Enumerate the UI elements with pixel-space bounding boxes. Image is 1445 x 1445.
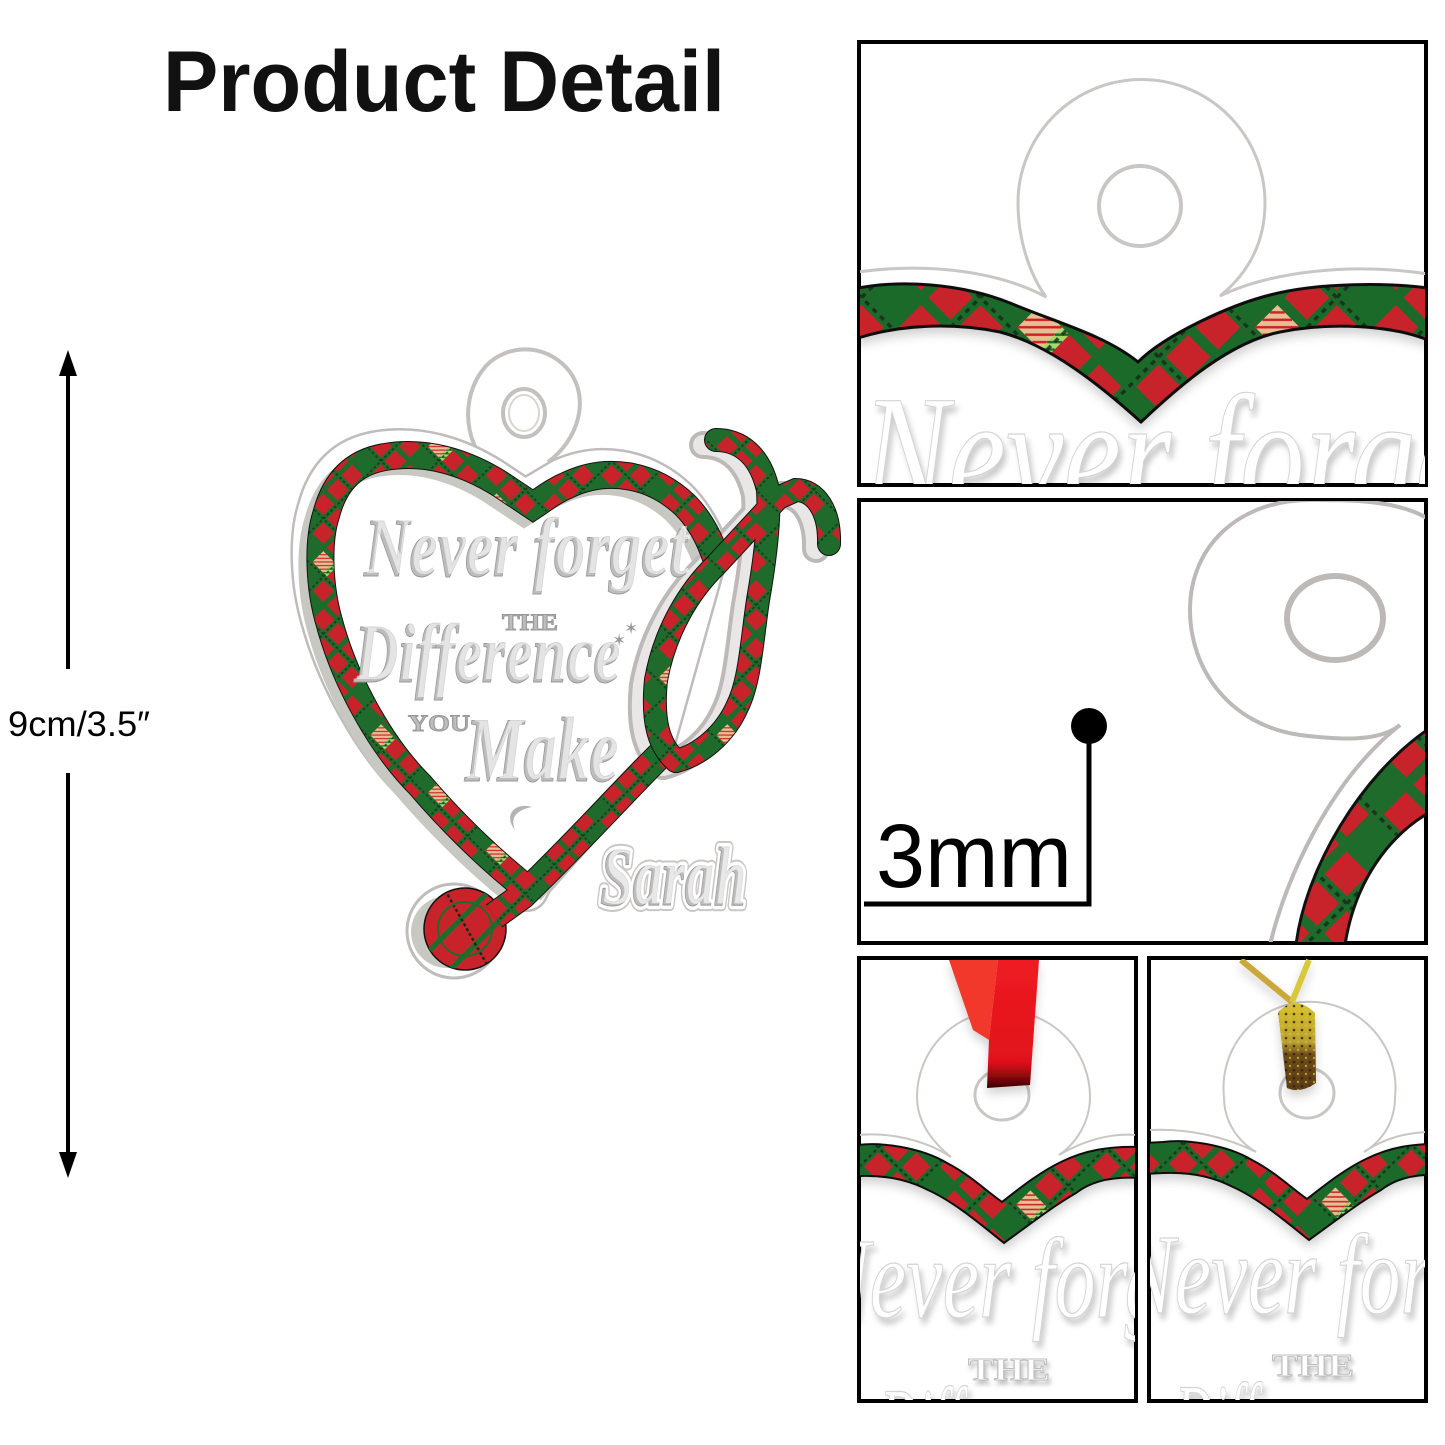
plaid heart band bbox=[320, 455, 716, 916]
engraved message: Difference bbox=[356, 605, 623, 698]
panel frame bbox=[859, 42, 1426, 485]
plaid band close-up bbox=[1145, 1141, 1445, 1240]
shadow of heart band bbox=[311, 462, 707, 902]
gold cord bbox=[1241, 960, 1316, 1090]
personalised name: Sarah bbox=[600, 831, 746, 924]
heart interior bbox=[343, 482, 690, 875]
tab hole bbox=[975, 1070, 1029, 1120]
engraved message: Never forget bbox=[366, 499, 691, 592]
panel: 3mm thickness bbox=[859, 500, 1430, 945]
tab hole bbox=[1099, 166, 1181, 246]
personalised name: Sarah bbox=[600, 831, 746, 924]
engraved the: THE bbox=[1272, 1347, 1354, 1383]
engraved message bbox=[353, 499, 691, 830]
plaid stethoscope tubes bbox=[655, 440, 829, 761]
text: the: THE bbox=[502, 610, 558, 635]
plaid band close-up bbox=[840, 1144, 1140, 1243]
text: you: YOU bbox=[408, 711, 470, 736]
arrow: upper segment bbox=[59, 350, 77, 669]
panel: gold cord option bbox=[1147, 956, 1428, 1403]
tab hole bbox=[1287, 576, 1383, 660]
decorative stars upper: ✶ bbox=[624, 619, 638, 638]
personalised name: Sarah bbox=[600, 831, 746, 924]
panel frame bbox=[859, 958, 1136, 1401]
engraved text: Never forget bbox=[814, 1215, 1227, 1342]
height dimension arrow bbox=[8, 350, 150, 1178]
ribbon bbox=[949, 960, 1039, 1088]
product: stethoscope heart ornament bbox=[311, 349, 829, 978]
hanging ring tab bbox=[468, 349, 580, 462]
plaid band close-up bbox=[1296, 728, 1430, 945]
text: make: Make bbox=[464, 699, 618, 801]
panel: close-up of notch bbox=[857, 40, 1428, 487]
panel frame bbox=[859, 500, 1426, 943]
personalised name: Sarah bbox=[603, 829, 749, 922]
engraved the: THE bbox=[968, 1351, 1050, 1387]
title: Product Detail bbox=[163, 34, 725, 130]
shadow of tubes bbox=[642, 445, 816, 766]
engraved message: Make bbox=[467, 696, 621, 798]
tab outline bbox=[858, 1010, 1137, 1157]
personalised name bbox=[600, 829, 749, 924]
text: difference: Difference bbox=[353, 608, 620, 701]
panel frame bbox=[1149, 958, 1426, 1401]
tab outline bbox=[1190, 500, 1430, 945]
acrylic outline bbox=[312, 450, 708, 890]
dimension label: 9cm/3.5″ bbox=[8, 705, 150, 744]
chest piece bbox=[407, 884, 510, 978]
tab outline bbox=[1150, 1002, 1428, 1152]
panel: red ribbon option bbox=[857, 956, 1138, 1403]
label: 3mm bbox=[876, 807, 1072, 907]
decorative stars: ✶ bbox=[612, 631, 626, 650]
acrylic tab outline bbox=[858, 80, 1428, 297]
plaid band close-up bbox=[858, 284, 1428, 422]
thickness indicator bbox=[864, 708, 1107, 907]
tab hole bbox=[1280, 1068, 1334, 1118]
arrow: lower segment bbox=[59, 773, 77, 1178]
small swash bbox=[510, 806, 532, 830]
text: never forget: Never forget bbox=[363, 502, 688, 595]
